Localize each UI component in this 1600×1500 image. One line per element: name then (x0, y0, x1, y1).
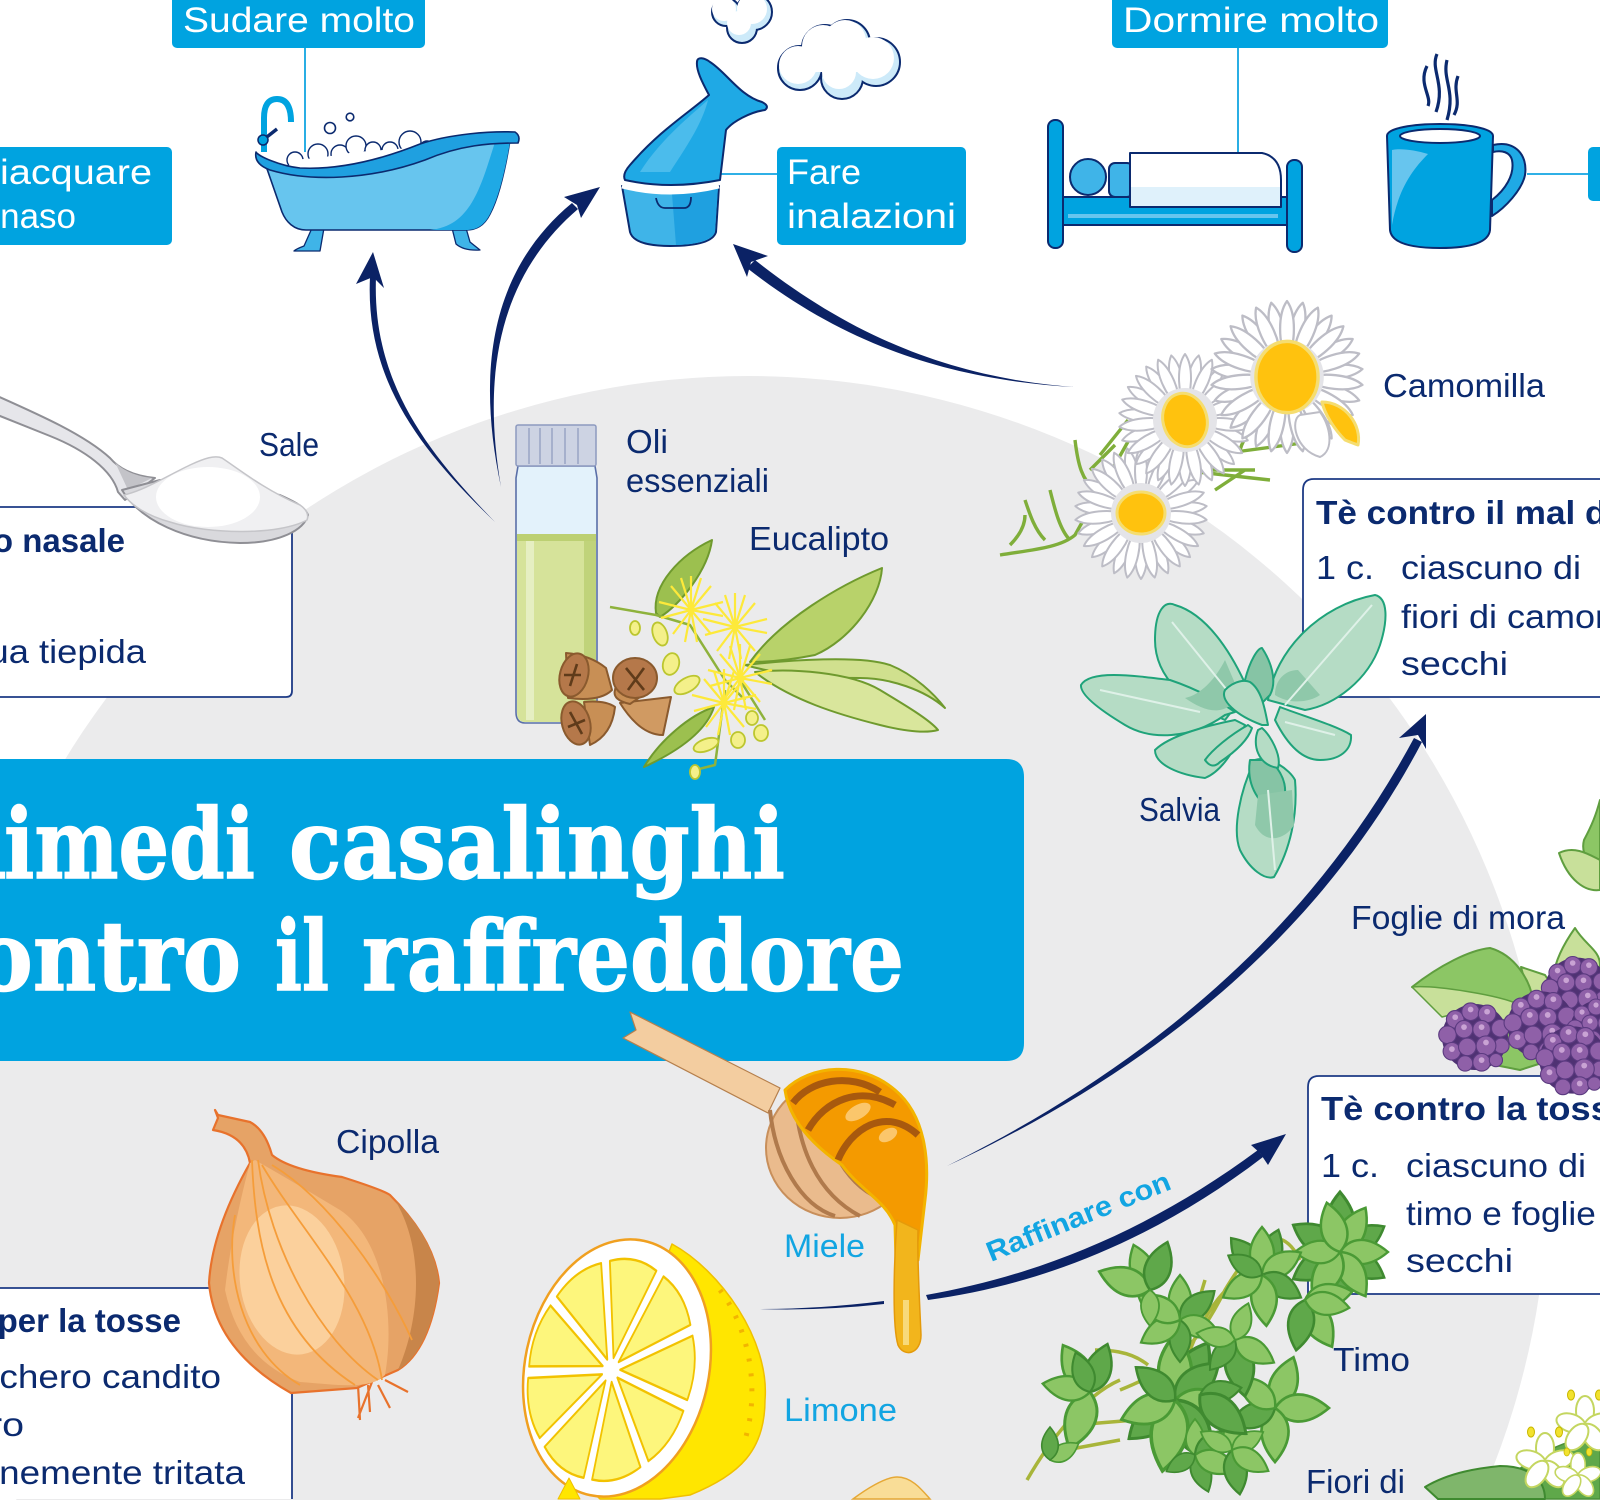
label: Fare inalazioni (777, 147, 966, 245)
card: te contro il mal di gola (1303, 479, 1600, 697)
labels: ingredients: Salvia (1139, 791, 1221, 828)
labels: ingredients: Cipolla (336, 1123, 440, 1160)
arrow: oli essenziali to inalazioni (490, 187, 600, 487)
connector lines (305, 48, 1590, 174)
labels: ingredients: Camomilla (1383, 367, 1546, 404)
label: Raffinare con: Raffinare con (982, 1165, 1175, 1268)
icon: eucalyptus (555, 540, 945, 779)
labels: ingredients: Limone (784, 1392, 897, 1428)
card: te contro la tosse: ciascuno di (1406, 1147, 1586, 1184)
title banner (0, 759, 1024, 1061)
title banner: casalinghi (289, 788, 785, 901)
icon: bathtub (256, 99, 519, 251)
labels: ingredients: Oli (626, 423, 668, 460)
icon: essential oil vial (516, 425, 597, 723)
label: Fare inalazioni: inalazioni (787, 197, 956, 236)
icon: lemon (500, 1222, 765, 1500)
label: Dormire molto (1112, 0, 1388, 48)
card: te contro il mal di gola: secchi (1401, 645, 1508, 682)
icon: spoon with salt (0, 395, 308, 543)
arrow: sale to bagno (356, 252, 495, 522)
card: te contro la tosse: 1 c. (1321, 1147, 1379, 1184)
card: te contro la tosse: Tè contro la tosse (1321, 1090, 1600, 1127)
card: te contro la tosse: secchi (1406, 1242, 1513, 1279)
card: lavaggio nasale (0, 507, 292, 697)
labels: ingredients (259, 367, 1566, 1500)
icon: steam inhaler (622, 58, 767, 246)
card: te contro il mal di gola: ciascuno di (1401, 549, 1581, 586)
icon: clouds (712, 0, 899, 98)
label: Fare inalazioni: Fare (787, 153, 861, 192)
labels: ingredients: Foglie di mora (1351, 899, 1566, 936)
icon: small fruit at bottom (853, 1477, 930, 1499)
icon: sage (1081, 595, 1385, 878)
icon: mug (1387, 54, 1525, 248)
labels: ingredients: Sale (259, 426, 319, 463)
label: Risciacquare il naso (0, 147, 172, 245)
icon: blackberries and leaves (1412, 800, 1600, 1095)
card: te contro il mal di gola: 1 c. (1316, 549, 1374, 586)
title banner: il (275, 900, 329, 1013)
label: Dormire molto: Dormire molto (1123, 1, 1379, 40)
icon: bed (1048, 120, 1302, 252)
icon: elderflower and leaves (1425, 1390, 1600, 1500)
labels: ingredients: essenziali (626, 462, 769, 499)
background circle (0, 376, 1548, 1500)
title banner: raffreddore (362, 900, 904, 1013)
arrow: camomilla to inalazioni (733, 244, 1074, 387)
labels: ingredients: Eucalipto (749, 520, 889, 557)
labels: ingredients: Miele (784, 1228, 865, 1264)
card: te contro la tosse (1308, 1076, 1600, 1294)
icon: onion (209, 1110, 439, 1420)
card: sciroppo per la tosse (0, 1288, 292, 1499)
arrow: limone e miele to te tosse (760, 1134, 1286, 1309)
labels: ingredients: Timo (1333, 1341, 1410, 1378)
labels: ingredients: Fiori di (1306, 1463, 1405, 1500)
icon: thyme (1027, 1192, 1391, 1496)
arrow: miele to te mal di gola (947, 714, 1426, 1166)
icon: chamomile (1000, 287, 1377, 591)
label: Bere molto (1588, 147, 1600, 201)
label: Sudare molto: Sudare molto (183, 1, 415, 40)
label: Sudare molto (172, 0, 425, 48)
icon: honey dipper (623, 1012, 927, 1353)
sub-icon: gum nuts (555, 650, 671, 748)
